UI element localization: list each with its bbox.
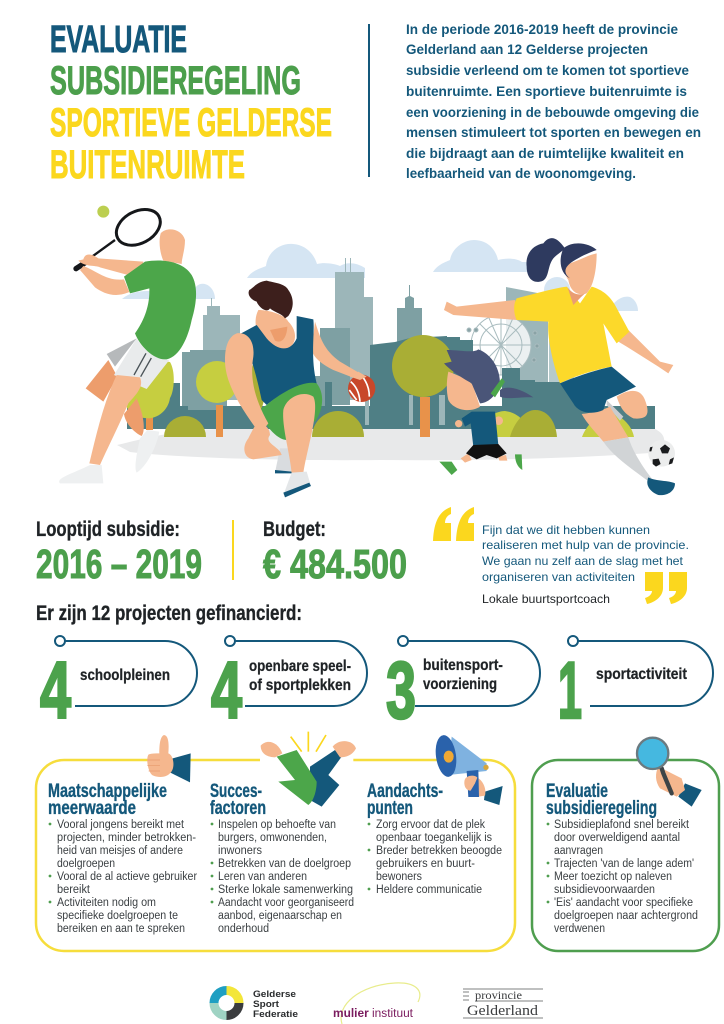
column: succesfactoren: onderhoud (218, 923, 269, 935)
heading: projecten: Er zijn 12 projecten gefinancierd: (36, 602, 302, 625)
column: succesfactoren: burgers, omwonenden, (218, 832, 327, 844)
column: evaluatie subsidieregeling: aanvragen (554, 845, 603, 857)
stat: budget: Budget: (263, 518, 326, 541)
icon: hair (249, 281, 293, 318)
column: succesfactoren: Betrekken van de doelgroep (218, 858, 351, 870)
icon: rugby ball (348, 372, 375, 402)
card: buitensportvoorziening: 3 (386, 646, 416, 736)
card: buitensportvoorziening: voorziening (423, 676, 497, 693)
mid buildings (182, 285, 422, 420)
column: maatschappelijke meerwaarde: bereikt (57, 884, 91, 896)
column: maatschappelijke meerwaarde: bereiken en aan te spreken (57, 923, 185, 935)
column: succesfactoren: Succes- (210, 781, 262, 802)
card: sportactiviteit (558, 636, 713, 736)
illustration: city skyline background (117, 240, 664, 460)
stat: looptijd subsidie: 2016 – 2019 (36, 541, 202, 587)
column: evaluatie subsidieregeling: Evaluatie (546, 781, 608, 802)
stat: looptijd subsidie (36, 518, 202, 587)
column: evaluatie subsidieregeling: Meer toezicht op naleven (554, 871, 672, 883)
title: EVALUATIE (50, 19, 187, 61)
column: maatschappelijke meerwaarde (48, 781, 197, 935)
quote text: organiseren van activiteiten (482, 570, 635, 584)
dark buildings (127, 336, 655, 429)
icon: fist bump (260, 732, 356, 807)
column: maatschappelijke meerwaarde: meerwaarde (48, 798, 136, 819)
column: aandachtspunten: Aandachts- (367, 781, 443, 802)
ground (117, 429, 664, 460)
icon: thumbs up (147, 735, 191, 782)
logo: Mulier Instituut: mulier instituut (333, 1008, 414, 1020)
column: succesfactoren: Inspelen op behoefte van (218, 819, 336, 831)
title: BUITENRUIMTE (50, 143, 245, 187)
column: aandachtspunten (367, 781, 502, 896)
intro text: een voorziening in de bebouwde omgeving die (406, 104, 699, 120)
card: schoolpleinen (40, 636, 197, 736)
title (50, 19, 332, 187)
column: succesfactoren (210, 781, 354, 935)
intro text: die bijdraagt aan de ruimtelijke kwaliteit en (406, 145, 684, 161)
column: evaluatie subsidieregeling: Trajecten 'van de lange adem' (554, 858, 694, 870)
quote text: Fijn dat we dit hebben kunnen (482, 523, 650, 537)
column: evaluatie subsidieregeling: subsidievoorwaarden (554, 884, 655, 896)
column: maatschappelijke meerwaarde: doelgroepen (57, 858, 115, 870)
card: openbare speel- of sportplekken (211, 636, 367, 736)
logo: provincie Gelderland (463, 989, 543, 1019)
column: succesfactoren: Aandacht voor georganiseerd (218, 897, 354, 909)
stat: budget (263, 518, 407, 587)
column: aandachtspunten: punten (367, 798, 413, 819)
column: maatschappelijke meerwaarde: Maatschappelijke (48, 781, 167, 802)
column: aandachtspunten: bewoners (376, 871, 422, 883)
column: aandachtspunten: Zorg ervoor dat de plek (376, 819, 485, 831)
logo: Gelderse Sport Federatie (214, 989, 298, 1020)
illustration: tennis player (59, 202, 196, 483)
column: maatschappelijke meerwaarde: specifieke doelgroepen te (57, 910, 178, 922)
card: openbare speel- of sportplekken: 4 (211, 646, 242, 736)
column: succesfactoren: inwoners (218, 845, 262, 857)
column: succesfactoren: factoren (210, 798, 266, 819)
card: buitensportvoorziening: buitensport- (423, 657, 503, 674)
column: maatschappelijke meerwaarde: projecten, minder betrokken- (57, 832, 196, 844)
column: evaluatie subsidieregeling (546, 781, 698, 935)
card: openbare speel- of sportplekken: openbare speel- (249, 658, 351, 675)
card: schoolpleinen: schoolpleinen (80, 667, 170, 684)
quote text (482, 523, 689, 606)
column: evaluatie subsidieregeling: Subsidieplafond snel bereikt (554, 819, 690, 831)
quote text: realiseren met hulp van de provincie. (482, 538, 689, 552)
quote text: Lokale buurtsportcoach (482, 592, 610, 606)
intro text: mensen stimuleert tot sporten en bewegen en (406, 124, 701, 140)
intro text: buitenruimte. Een sportieve buitenruimte is (406, 83, 687, 99)
logo: Gelderse Sport Federatie: Gelderse (253, 989, 296, 1000)
card: sportactiviteit: 1 (558, 646, 582, 736)
column: succesfactoren: aanbod, eigenaarschap en (218, 910, 342, 922)
column: evaluatie subsidieregeling: door overweldigend aantal (554, 832, 680, 844)
title: SUBSIDIEREGELING (50, 59, 301, 103)
column: evaluatie subsidieregeling: doelgroepen naar achtergrond (554, 910, 698, 922)
light buildings (203, 258, 574, 400)
column: maatschappelijke meerwaarde: heid van meisjes of andere (57, 845, 183, 857)
column: succesfactoren: Leren van anderen (218, 871, 307, 883)
icon: ferris wheel (467, 315, 539, 375)
column: aandachtspunten: Breder betrekken beoogde (376, 845, 502, 857)
illustration: child (439, 349, 533, 475)
intro text: In de periode 2016-2019 heeft de provincie (406, 21, 678, 37)
intro text: subsidie verleend om te komen tot sportieve (406, 62, 689, 78)
card: buitensportvoorziening (386, 636, 540, 736)
icon: megaphone (433, 734, 503, 805)
logo: Mulier Instituut (333, 983, 420, 1024)
icon: tennis ball (97, 206, 109, 218)
panel: yellow frame (36, 760, 515, 951)
column: evaluatie subsidieregeling: 'Eis' aandacht voor specifieke (554, 897, 693, 909)
quote text: We gaan nu zelf aan de slag met het (482, 554, 684, 568)
card: openbare speel- of sportplekken: of sportplekken (249, 677, 351, 694)
column: evaluatie subsidieregeling: subsidieregeling (546, 798, 657, 819)
icon: magnifying glass (637, 738, 702, 807)
illustration: soccer player (444, 238, 675, 495)
icon: racket (76, 202, 166, 269)
intro text (406, 21, 701, 181)
column: aandachtspunten: openbaar toegankelijk is (376, 832, 492, 844)
stat: budget: € 484.500 (263, 541, 407, 587)
title: SPORTIEVE GELDERSE (50, 101, 332, 145)
trees and bushes (125, 335, 634, 437)
intro text: leefbaarheid van de woonomgeving. (406, 165, 636, 181)
icon: opening quote (433, 507, 474, 541)
card: sportactiviteit: sportactiviteit (596, 666, 688, 683)
logo: Gelderse Sport Federatie: Sport (253, 999, 280, 1010)
icon: clouds (122, 240, 638, 311)
column: aandachtspunten: gebruikers en buurt- (376, 858, 475, 870)
column: succesfactoren: Sterke lokale samenwerking (218, 884, 353, 896)
column: maatschappelijke meerwaarde: Vooral de al actieve gebruiker (57, 871, 197, 883)
stat: looptijd subsidie: Looptijd subsidie: (36, 518, 180, 541)
column: aandachtspunten: Heldere communicatie (376, 884, 482, 896)
card: schoolpleinen: 4 (40, 646, 71, 736)
logo: provincie Gelderland: provincie (475, 990, 522, 1002)
column: maatschappelijke meerwaarde: Activiteiten nodig om (57, 897, 156, 909)
illustration: kneeling basketball player (225, 281, 360, 497)
column: maatschappelijke meerwaarde: Vooral jongens bereikt met (57, 819, 185, 831)
icon: closing quote (645, 572, 687, 604)
logo: Gelderse Sport Federatie: Federatie (253, 1009, 298, 1020)
column: evaluatie subsidieregeling: verdwenen (554, 923, 605, 935)
icon: soccer ball (648, 440, 675, 467)
logo: provincie Gelderland: Gelderland (467, 1003, 539, 1019)
intro text: Gelderland aan 12 Gelderse projecten (406, 41, 648, 57)
panel: green frame (532, 760, 719, 951)
